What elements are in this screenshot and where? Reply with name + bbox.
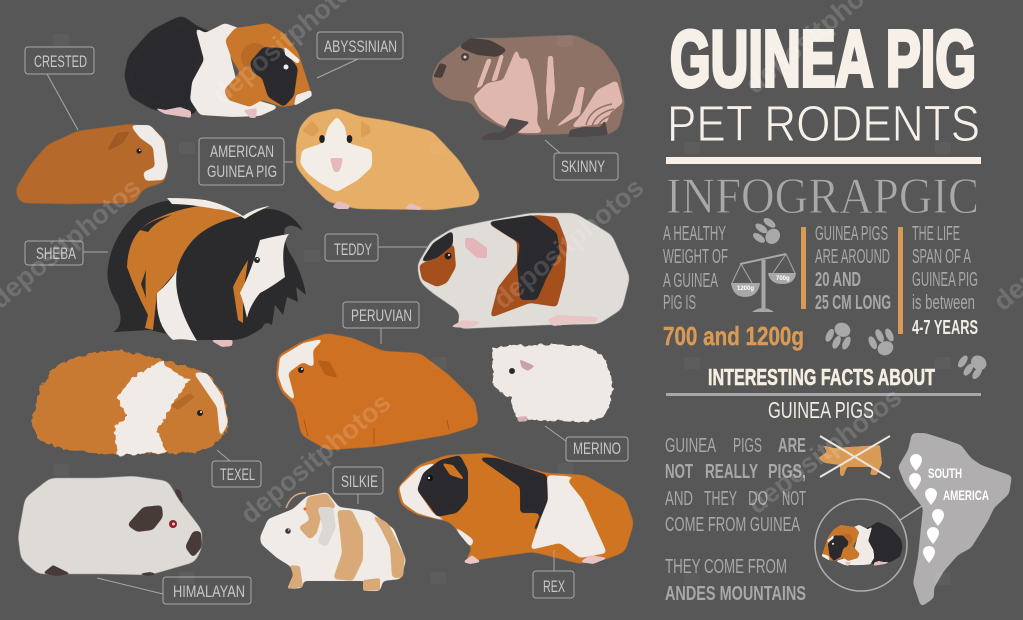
pig: rex bbox=[397, 453, 634, 564]
text block: not really pigs: ARE bbox=[778, 435, 806, 457]
map: south america: AMERICA bbox=[943, 487, 989, 503]
fact: length: ARE AROUND bbox=[815, 246, 890, 268]
label: peruvian: PERUVIAN bbox=[351, 306, 412, 325]
pig: peruvian bbox=[276, 333, 479, 450]
label: silkie bbox=[333, 467, 383, 504]
fact: healthy weight: A HEALTHY bbox=[663, 223, 726, 245]
text block: not really pigs: COME FROM GUINEA bbox=[665, 514, 800, 536]
watermark: depositphotos: depositphotos bbox=[488, 172, 649, 315]
pig: teddy bbox=[417, 213, 630, 329]
fact: healthy weight: A GUINEA bbox=[663, 270, 718, 292]
pig: himalayan bbox=[18, 476, 202, 576]
facts rule bbox=[666, 393, 981, 396]
fact: healthy weight: WEIGHT OF bbox=[663, 246, 728, 268]
fact: life span: is between bbox=[912, 292, 975, 314]
label: sheba: SHEBA bbox=[36, 244, 76, 263]
fact: length: 25 CM LONG bbox=[815, 292, 891, 314]
label: teddy bbox=[325, 234, 427, 261]
fact: length: GUINEA PIGS bbox=[815, 223, 888, 245]
fact: life span: THE LIFE bbox=[912, 223, 960, 245]
label: silkie: SILKIE bbox=[341, 472, 378, 491]
divider bar right bbox=[898, 227, 903, 334]
icon: crossed-out pig bbox=[818, 436, 890, 478]
pig: skinny bbox=[431, 35, 625, 140]
fact: life span: 4-7 YEARS bbox=[912, 317, 978, 339]
text block: not really pigs: GUINEA bbox=[665, 435, 716, 457]
label: merino: MERINO bbox=[573, 439, 621, 458]
fact: life span: SPAN OF A bbox=[912, 246, 971, 268]
subtitle: pet rodents: PET RODENTS bbox=[667, 95, 980, 152]
pig: american guinea pig bbox=[296, 108, 481, 210]
text block: not really pigs: AND bbox=[665, 488, 693, 510]
fact: healthy weight: 700 and 1200g bbox=[663, 321, 804, 351]
label: peruvian bbox=[343, 302, 419, 344]
fact: length bbox=[815, 223, 891, 314]
fact: life span bbox=[912, 223, 978, 339]
fact: healthy weight: PIG IS bbox=[663, 292, 696, 314]
icon: balance scale: 700g bbox=[776, 276, 790, 282]
label: rex: REX bbox=[543, 577, 565, 596]
label: american guinea pig bbox=[199, 138, 293, 185]
label: texel bbox=[212, 450, 261, 487]
icon: balance scale bbox=[731, 254, 796, 312]
label: skinny bbox=[545, 140, 618, 180]
label: texel: TEXEL bbox=[220, 465, 255, 484]
heading: infograpgic: INFOGRAPGIC bbox=[666, 169, 979, 225]
text block: not really pigs: REALLY bbox=[705, 461, 758, 483]
icon: paw print right bbox=[865, 324, 900, 360]
watermark: camera marks bbox=[53, 34, 951, 585]
pig: crested bbox=[15, 124, 168, 204]
fact: healthy weight bbox=[663, 223, 804, 351]
text block: not really pigs: PIGS, bbox=[768, 461, 806, 483]
map: south america bbox=[898, 433, 1012, 607]
text block: not really pigs: NOT bbox=[782, 488, 806, 510]
fact: length: 20 AND bbox=[815, 269, 861, 291]
callout: habitat pig circle bbox=[815, 499, 925, 591]
text block: not really pigs: THEY bbox=[704, 488, 737, 510]
label: skinny: SKINNY bbox=[561, 157, 605, 176]
pig: sheba bbox=[107, 198, 306, 347]
heading: interesting facts about: INTERESTING FACTS ABOUT bbox=[708, 364, 935, 390]
label: sheba bbox=[25, 241, 108, 265]
label: crested bbox=[25, 47, 94, 130]
icon: paw print middle bbox=[822, 318, 857, 354]
heading: guinea pigs: GUINEA PIGS bbox=[768, 397, 874, 423]
icon: paw print far right bbox=[954, 347, 989, 383]
icon: paw print top bbox=[748, 214, 786, 251]
pig: abyssinian bbox=[124, 15, 312, 118]
label: rex bbox=[533, 550, 574, 598]
watermark: depositphotos: depositphotos bbox=[235, 387, 396, 530]
map: south america: SOUTH bbox=[928, 465, 962, 481]
label: merino bbox=[545, 426, 628, 461]
title rule bbox=[666, 157, 981, 164]
label: abyssinian bbox=[317, 32, 403, 78]
text block: not really pigs: ANDES MOUNTAINS bbox=[665, 583, 806, 605]
label: american guinea pig: AMERICAN bbox=[210, 142, 274, 161]
label: abyssinian: ABYSSINIAN bbox=[324, 37, 397, 56]
label: teddy: TEDDY bbox=[334, 240, 372, 259]
label: american guinea pig: GUINEA PIG bbox=[207, 162, 277, 181]
pig: merino bbox=[492, 345, 612, 422]
icon: balance scale: 1200g bbox=[737, 286, 754, 292]
text block: not really pigs: THEY COME FROM bbox=[665, 556, 787, 578]
label: himalayan: HIMALAYAN bbox=[173, 582, 245, 601]
text block: not really pigs bbox=[665, 435, 806, 605]
watermark: depositphotos: depositphotos bbox=[742, 382, 907, 520]
text block: not really pigs: DO bbox=[748, 488, 768, 510]
pig: silkie bbox=[260, 492, 406, 591]
divider bar left bbox=[801, 227, 806, 309]
label: himalayan bbox=[97, 577, 251, 604]
text block: not really pigs: PIGS bbox=[733, 435, 762, 457]
label: crested: CRESTED bbox=[34, 52, 87, 71]
text block: not really pigs: NOT bbox=[665, 461, 693, 483]
pig: texel bbox=[32, 350, 228, 455]
